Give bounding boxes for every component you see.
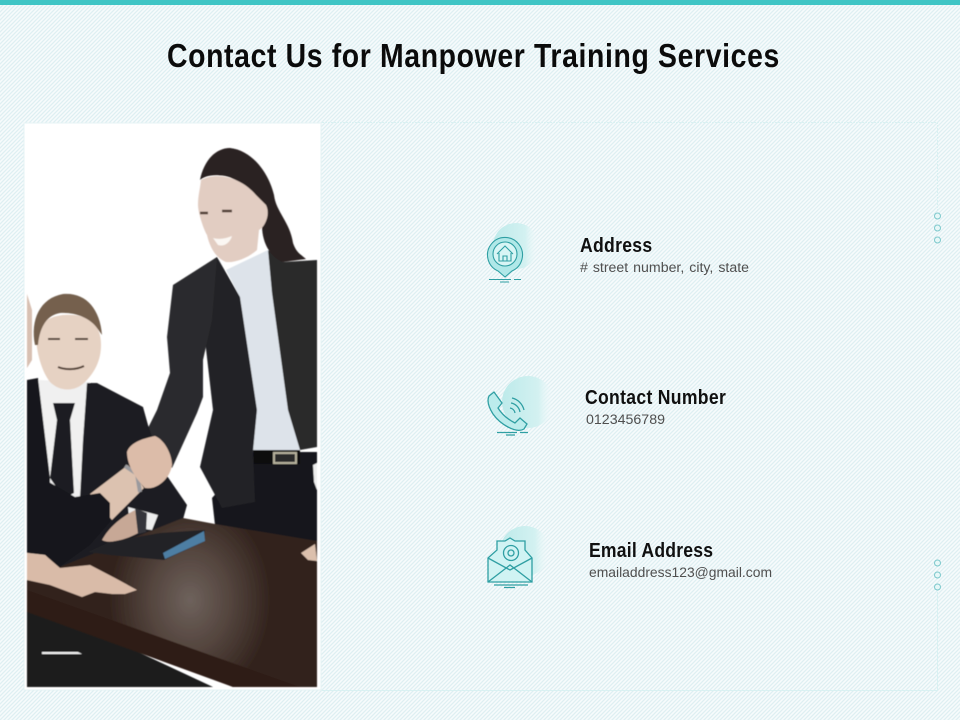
top accent bar bbox=[0, 0, 960, 5]
tablet blue cover bbox=[163, 531, 205, 559]
contact row: email bbox=[488, 526, 772, 588]
contact row: address bbox=[487, 223, 749, 282]
bracelet bbox=[125, 466, 140, 492]
upper dots bbox=[934, 213, 940, 243]
woman jacket body bbox=[185, 257, 257, 508]
decorative frame: top and upper right bbox=[322, 122, 938, 212]
foreground shoulder edge bbox=[27, 294, 32, 368]
heading: contact number: Contact Number bbox=[585, 386, 726, 408]
lower left dark area bbox=[27, 600, 213, 687]
woman hair bbox=[200, 148, 306, 262]
man cuff bbox=[128, 507, 158, 530]
email value: emailaddress123@gmail.com bbox=[589, 564, 772, 580]
woman shirt bbox=[226, 250, 300, 450]
woman face bbox=[198, 176, 268, 262]
heading: address: Address bbox=[580, 234, 652, 256]
man jacket left bbox=[27, 378, 50, 540]
foreground sleeve bbox=[27, 466, 110, 568]
woman sleeve bbox=[146, 257, 217, 468]
photo card bbox=[24, 123, 321, 690]
icon: telephone bbox=[488, 376, 554, 435]
icon: envelope bbox=[488, 526, 550, 588]
photo illustration bbox=[27, 148, 317, 687]
woman smile bbox=[213, 236, 232, 246]
watch bbox=[135, 508, 147, 534]
icon: location pin with house bbox=[487, 223, 539, 282]
table bbox=[27, 518, 317, 687]
contact row: number bbox=[488, 376, 726, 435]
title: Contact Us for Manpower Training Services bbox=[167, 37, 779, 75]
handshake bbox=[127, 436, 172, 488]
heading: email address: Email Address bbox=[589, 539, 713, 561]
man hair bbox=[34, 294, 102, 345]
foreground forearm bbox=[90, 465, 144, 520]
white sliver bbox=[313, 463, 317, 490]
man shirt bbox=[37, 380, 90, 500]
man eyes and mouth bbox=[48, 339, 88, 369]
table front edge bbox=[27, 590, 300, 687]
phone number: 0123456789 bbox=[586, 411, 665, 427]
small hand right bbox=[301, 544, 317, 561]
man tie bbox=[50, 403, 75, 498]
photo panel: business handshake bbox=[24, 123, 321, 690]
belt buckle bbox=[274, 453, 296, 463]
decorative frame: bottom and lower right bbox=[322, 592, 938, 690]
woman belt bbox=[253, 450, 300, 464]
man hand bbox=[102, 510, 140, 542]
tablet bbox=[88, 530, 205, 560]
woman trousers bbox=[212, 452, 317, 545]
woman eyes bbox=[200, 211, 232, 213]
lower dots bbox=[934, 560, 940, 590]
white slit under table bbox=[42, 652, 82, 654]
woman jacket right bbox=[268, 250, 317, 450]
man jacket right bbox=[40, 383, 187, 580]
address details: # street number, city, state bbox=[580, 260, 749, 275]
man face bbox=[36, 315, 101, 390]
foreground hand bbox=[27, 553, 137, 597]
